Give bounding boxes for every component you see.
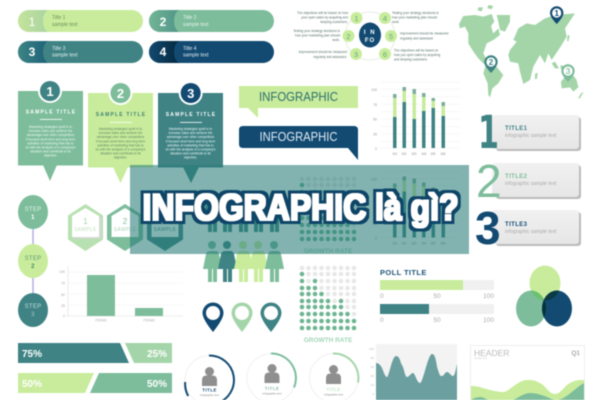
info ring diagram: work. <box>392 20 400 24</box>
title box 3: TITLE3 <box>505 222 528 228</box>
info ring diagram: 5 <box>389 32 393 41</box>
people row beneath banner <box>203 191 284 232</box>
hexagon badges: SAMPLE <box>114 227 137 233</box>
profile circle 1: infographic text <box>200 393 219 397</box>
area chart <box>369 344 457 400</box>
card 1: advantage over other competitors <box>27 133 75 137</box>
title box 3 <box>475 202 581 254</box>
pill: title 1: sample text <box>52 22 78 28</box>
hexagon badges: 1 <box>83 217 88 226</box>
info ring diagram: regularly and assessed. <box>400 36 434 40</box>
hexagon badges <box>68 204 183 251</box>
card 2: increase sales and achieve the <box>99 131 143 135</box>
card 3: 3 <box>187 86 194 101</box>
stacked bar chart: 100 <box>371 88 377 92</box>
title box 2: TITLE2 <box>505 174 528 180</box>
people pictogram <box>203 241 284 282</box>
dot grid: growth rate: GROWTH RATE <box>304 337 353 344</box>
profile circle 2 <box>247 353 296 400</box>
card 2: advantage over other competitors <box>97 135 145 139</box>
info ring diagram: Improvement should be measured <box>400 32 449 36</box>
stacked bar chart: 75 <box>373 103 377 107</box>
percent bars: 50% <box>22 379 42 390</box>
area chart: 40 <box>371 374 374 378</box>
info ring diagram: FO <box>365 38 375 44</box>
location pins <box>202 302 282 332</box>
info ring diagram: work. <box>332 38 340 42</box>
card 1: objective. <box>44 154 57 158</box>
title box 1: TITLE1 <box>505 126 528 132</box>
profile circle 1: TITLE <box>202 388 217 392</box>
poll chart <box>380 268 494 324</box>
speech bubble: dark: INFOGRAPHIC <box>260 130 338 144</box>
info ring diagram: Improvement should be measured <box>299 50 347 54</box>
card 2 <box>88 81 153 183</box>
poll chart: 100 <box>483 317 494 324</box>
banner overlay <box>130 165 469 254</box>
info ring diagram: Testing your strategy decisions is <box>392 11 439 15</box>
profile circle 3 <box>310 353 358 400</box>
column chart: 25 <box>61 304 65 308</box>
column chart: 50 <box>61 293 65 297</box>
card 3: do with the analysis of a company's <box>165 148 216 152</box>
title box 1: 1 <box>478 106 499 159</box>
title box 2: infographic sample text <box>505 181 557 187</box>
speech bubble: light <box>239 86 358 118</box>
card 2: It focuses short term and long term <box>96 139 145 143</box>
info ring diagram: 3 <box>354 50 358 59</box>
profile circle 2: infographic text <box>263 392 282 396</box>
pill: title 4: 4 <box>160 45 167 59</box>
percent bars: 50% <box>147 379 167 390</box>
pill: title 4: sample text <box>183 52 209 58</box>
hexagon badges: SAMPLE <box>74 227 97 233</box>
pill: title 2: sample text <box>183 22 209 28</box>
card 1: It focuses short term and long term <box>26 137 75 141</box>
poll chart: 50 <box>433 317 441 324</box>
pill: title 3: sample text <box>52 52 78 58</box>
info ring diagram: I N <box>364 30 376 36</box>
column chart: 0 <box>63 314 65 318</box>
title box 1: infographic sample text <box>505 133 557 139</box>
poll chart: 50 <box>433 293 441 300</box>
header wave card <box>470 346 584 400</box>
column chart: 75 <box>61 282 65 286</box>
steps timeline: 2 <box>31 264 35 270</box>
info ring diagram: 1 <box>354 14 359 23</box>
profile circle 2: TITLE <box>265 386 279 391</box>
column chart <box>59 266 183 322</box>
stacked bar chart: 50 <box>373 118 377 122</box>
title box 3: infographic sample text <box>505 229 557 235</box>
stacked bar chart: M1 <box>393 152 397 156</box>
dot grid copy beneath banner <box>300 177 356 255</box>
stacked bar chart <box>371 82 460 156</box>
stacked chart copy beneath banner <box>371 172 460 246</box>
pill: title 1 <box>18 10 143 32</box>
card 2: situation and contribute to its <box>100 152 141 156</box>
info ring diagram: The objectives will be based on how <box>297 11 349 15</box>
profile circle 3: TITLE <box>326 387 341 392</box>
card 3: situation and contribute to its <box>170 152 211 156</box>
title box 3: 3 <box>475 202 501 254</box>
info ring diagram: 4 <box>383 14 387 23</box>
column chart: ITEM2 <box>143 318 156 322</box>
card 1: increase sales and achieve the <box>29 129 73 133</box>
info ring diagram: keeping customers. <box>320 20 348 24</box>
steps timeline: 3 <box>31 312 35 318</box>
header wave card: HEADER <box>474 348 509 358</box>
header wave card: Q1 <box>571 350 580 357</box>
pill: title 1: Title 1 <box>52 15 66 21</box>
info ring diagram: how you open sales by acquiring <box>394 53 440 57</box>
card 3: activities of marketing that has to <box>167 143 214 147</box>
stacked bar chart: M5 <box>431 152 435 156</box>
steps timeline: STEP <box>25 256 41 262</box>
column chart: ITEM1 <box>95 318 108 322</box>
hexagon badges: 3 <box>163 217 168 226</box>
profile circle 1 <box>185 355 234 400</box>
stacked bar chart: M2 <box>402 152 406 156</box>
card 2: do with the analysis of a company's <box>95 148 146 152</box>
area chart: 80 <box>371 356 374 360</box>
card 3: increase sales and achieve the <box>169 131 213 135</box>
card 2: Marketing strategies spelt in to <box>99 127 142 131</box>
card 1: 1 <box>46 84 54 99</box>
poll chart: POLL TITLE <box>380 268 427 277</box>
steps timeline: 1 <box>31 215 35 221</box>
title box 1 <box>478 106 581 159</box>
card 2: activities of marketing that has to <box>97 143 144 147</box>
pill: title 4: Title 4 <box>183 46 197 52</box>
stacked bar chart: 0 <box>375 147 377 151</box>
pill: title 3 <box>18 41 143 63</box>
column chart: 100 <box>59 270 65 274</box>
speech bubble: light: INFOGRAPHIC <box>259 90 338 104</box>
info ring diagram: how your marketing plan should <box>392 16 437 20</box>
header wave card: sample text <box>474 357 487 360</box>
card 3: Marketing strategies spelt in to <box>169 127 212 131</box>
dot grid: growth rate <box>300 266 356 344</box>
stacked bar chart: 25 <box>373 132 377 136</box>
stacked bar chart: M6 <box>441 152 445 156</box>
pill: title 2: Title 2 <box>183 15 197 21</box>
stacked bar chart: M4 <box>422 152 426 156</box>
percent bars: 25% <box>147 349 167 360</box>
profile circle 3: infographic text <box>324 392 343 396</box>
card 1: Marketing strategies spelt in to <box>29 125 72 129</box>
area chart: 100 <box>369 347 374 351</box>
percent bars: 75% <box>22 349 42 360</box>
world map <box>459 5 584 99</box>
card 1: situation and contribute to its <box>30 150 71 154</box>
area chart: 0 <box>372 392 374 396</box>
pill: title 4 <box>149 41 274 63</box>
info ring diagram: The objectives will be based on <box>394 48 439 52</box>
map pin 1: 1 <box>554 9 559 18</box>
speech bubble: dark <box>239 126 358 160</box>
info ring diagram <box>293 11 449 62</box>
steps timeline: STEP <box>25 304 41 310</box>
info ring diagram: regularly and assessed. <box>313 55 347 59</box>
info ring diagram: 2 <box>346 32 351 41</box>
info ring diagram: Testing your strategy decisions is <box>293 29 340 33</box>
title box 2 <box>476 155 581 207</box>
steps timeline <box>18 195 48 327</box>
card 2: SAMPLE TITLE <box>96 112 146 118</box>
card 3: It focuses short term and long term <box>166 139 215 143</box>
card 1: activities of marketing that has to <box>27 141 74 145</box>
card 3 <box>158 81 223 183</box>
poll chart: 100 <box>483 293 494 300</box>
stacked bar chart: M3 <box>412 152 416 156</box>
steps timeline: STEP <box>25 207 41 213</box>
info ring diagram: your open sales by acquiring and <box>301 16 348 20</box>
card 2: 2 <box>117 86 124 101</box>
card 3: SAMPLE TITLE <box>166 112 216 118</box>
title box 2: 2 <box>476 155 502 207</box>
area chart: 60 <box>371 365 374 369</box>
venn diagram <box>516 266 572 326</box>
pill: title 3: 3 <box>29 45 36 59</box>
pill: title 3: Title 3 <box>52 46 66 52</box>
card 1: SAMPLE TITLE <box>26 110 76 116</box>
poll chart: 0 <box>380 293 384 300</box>
card 3: advantage over other competitors <box>167 135 215 139</box>
poll chart: 0 <box>380 317 384 324</box>
pill: title 2 <box>149 10 274 32</box>
banner title: INFOGRAPHIC là gì? <box>142 187 458 228</box>
info ring diagram: how your marketing plan should <box>295 34 340 38</box>
info ring diagram: 6 <box>383 50 387 59</box>
info ring diagram: and keeping customers. <box>394 58 428 62</box>
card 3: objective. <box>184 156 197 160</box>
hexagon badges: 2 <box>123 217 128 226</box>
percent bars <box>18 343 172 393</box>
area chart: 20 <box>371 383 374 387</box>
map pin 2: 2 <box>489 58 494 67</box>
card 2: objective. <box>114 156 127 160</box>
card 1: do with the analysis of a company's <box>25 146 76 150</box>
hexagon badges: SAMPLE <box>154 227 177 233</box>
map pin 3: 3 <box>566 67 571 76</box>
card 1 <box>18 79 83 181</box>
pill: title 2: 2 <box>160 15 167 29</box>
pill: title 1: 1 <box>29 15 36 29</box>
